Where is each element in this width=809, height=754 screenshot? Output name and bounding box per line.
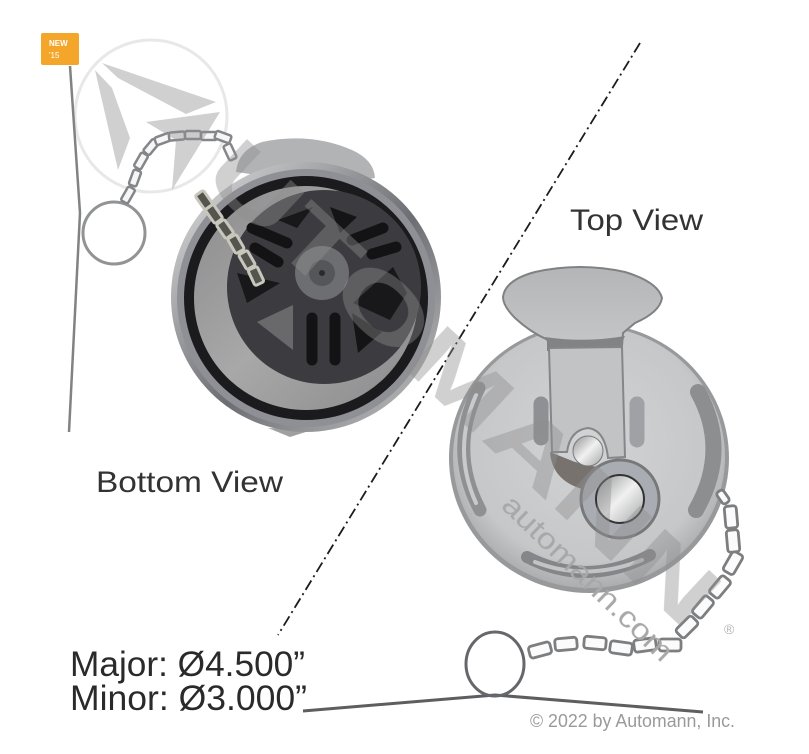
tab behind cap: [236, 138, 375, 185]
watermark logo circle: [75, 40, 227, 192]
badge: NEW '15: [41, 33, 79, 65]
rubber gasket: [184, 176, 428, 420]
specifications: Major: Ø4.500”: [70, 645, 305, 684]
latch strap: [549, 347, 625, 458]
bottom wire and ring: [303, 632, 703, 712]
bottom view cap: [171, 138, 441, 437]
dark grate: [227, 190, 421, 384]
outer rim: [171, 162, 441, 432]
label: Top View: Top View: [570, 204, 703, 237]
pin: [573, 436, 603, 466]
top-left wire and ring: [69, 66, 145, 432]
watermark: Automann wordmark: [95, 63, 741, 645]
main disc: [449, 323, 729, 593]
chain: bottom view, over cap: [195, 190, 264, 286]
watermark logo arrow: [95, 63, 220, 190]
grate windows: [237, 207, 407, 353]
specifications: [70, 645, 307, 718]
dark crescent: [550, 452, 610, 489]
badge: NEW '15: '15: [49, 51, 60, 60]
watermark: automann.com: automann.com: [495, 488, 680, 668]
inner metal wall: [194, 186, 418, 410]
specifications: Minor: Ø3.000”: [70, 679, 307, 718]
handle: [503, 267, 662, 350]
copyright: © 2022 by Automann, Inc.: [530, 711, 735, 731]
divider: dash-dot line: [278, 43, 640, 635]
handle fold: [545, 336, 625, 349]
grate slots: [252, 228, 396, 360]
chain: top view: [528, 489, 744, 659]
watermark: registered mark: ®: [724, 621, 735, 637]
watermark letters: UTOMANN: [187, 119, 741, 645]
curved grips: [464, 388, 714, 572]
top view cap: [449, 267, 729, 593]
centre hub: [295, 246, 349, 300]
chain: bottom view, loose section: [121, 131, 237, 204]
knob: [581, 460, 659, 538]
label: Bottom View: Bottom View: [96, 466, 283, 499]
badge: NEW '15: NEW: [49, 39, 68, 48]
